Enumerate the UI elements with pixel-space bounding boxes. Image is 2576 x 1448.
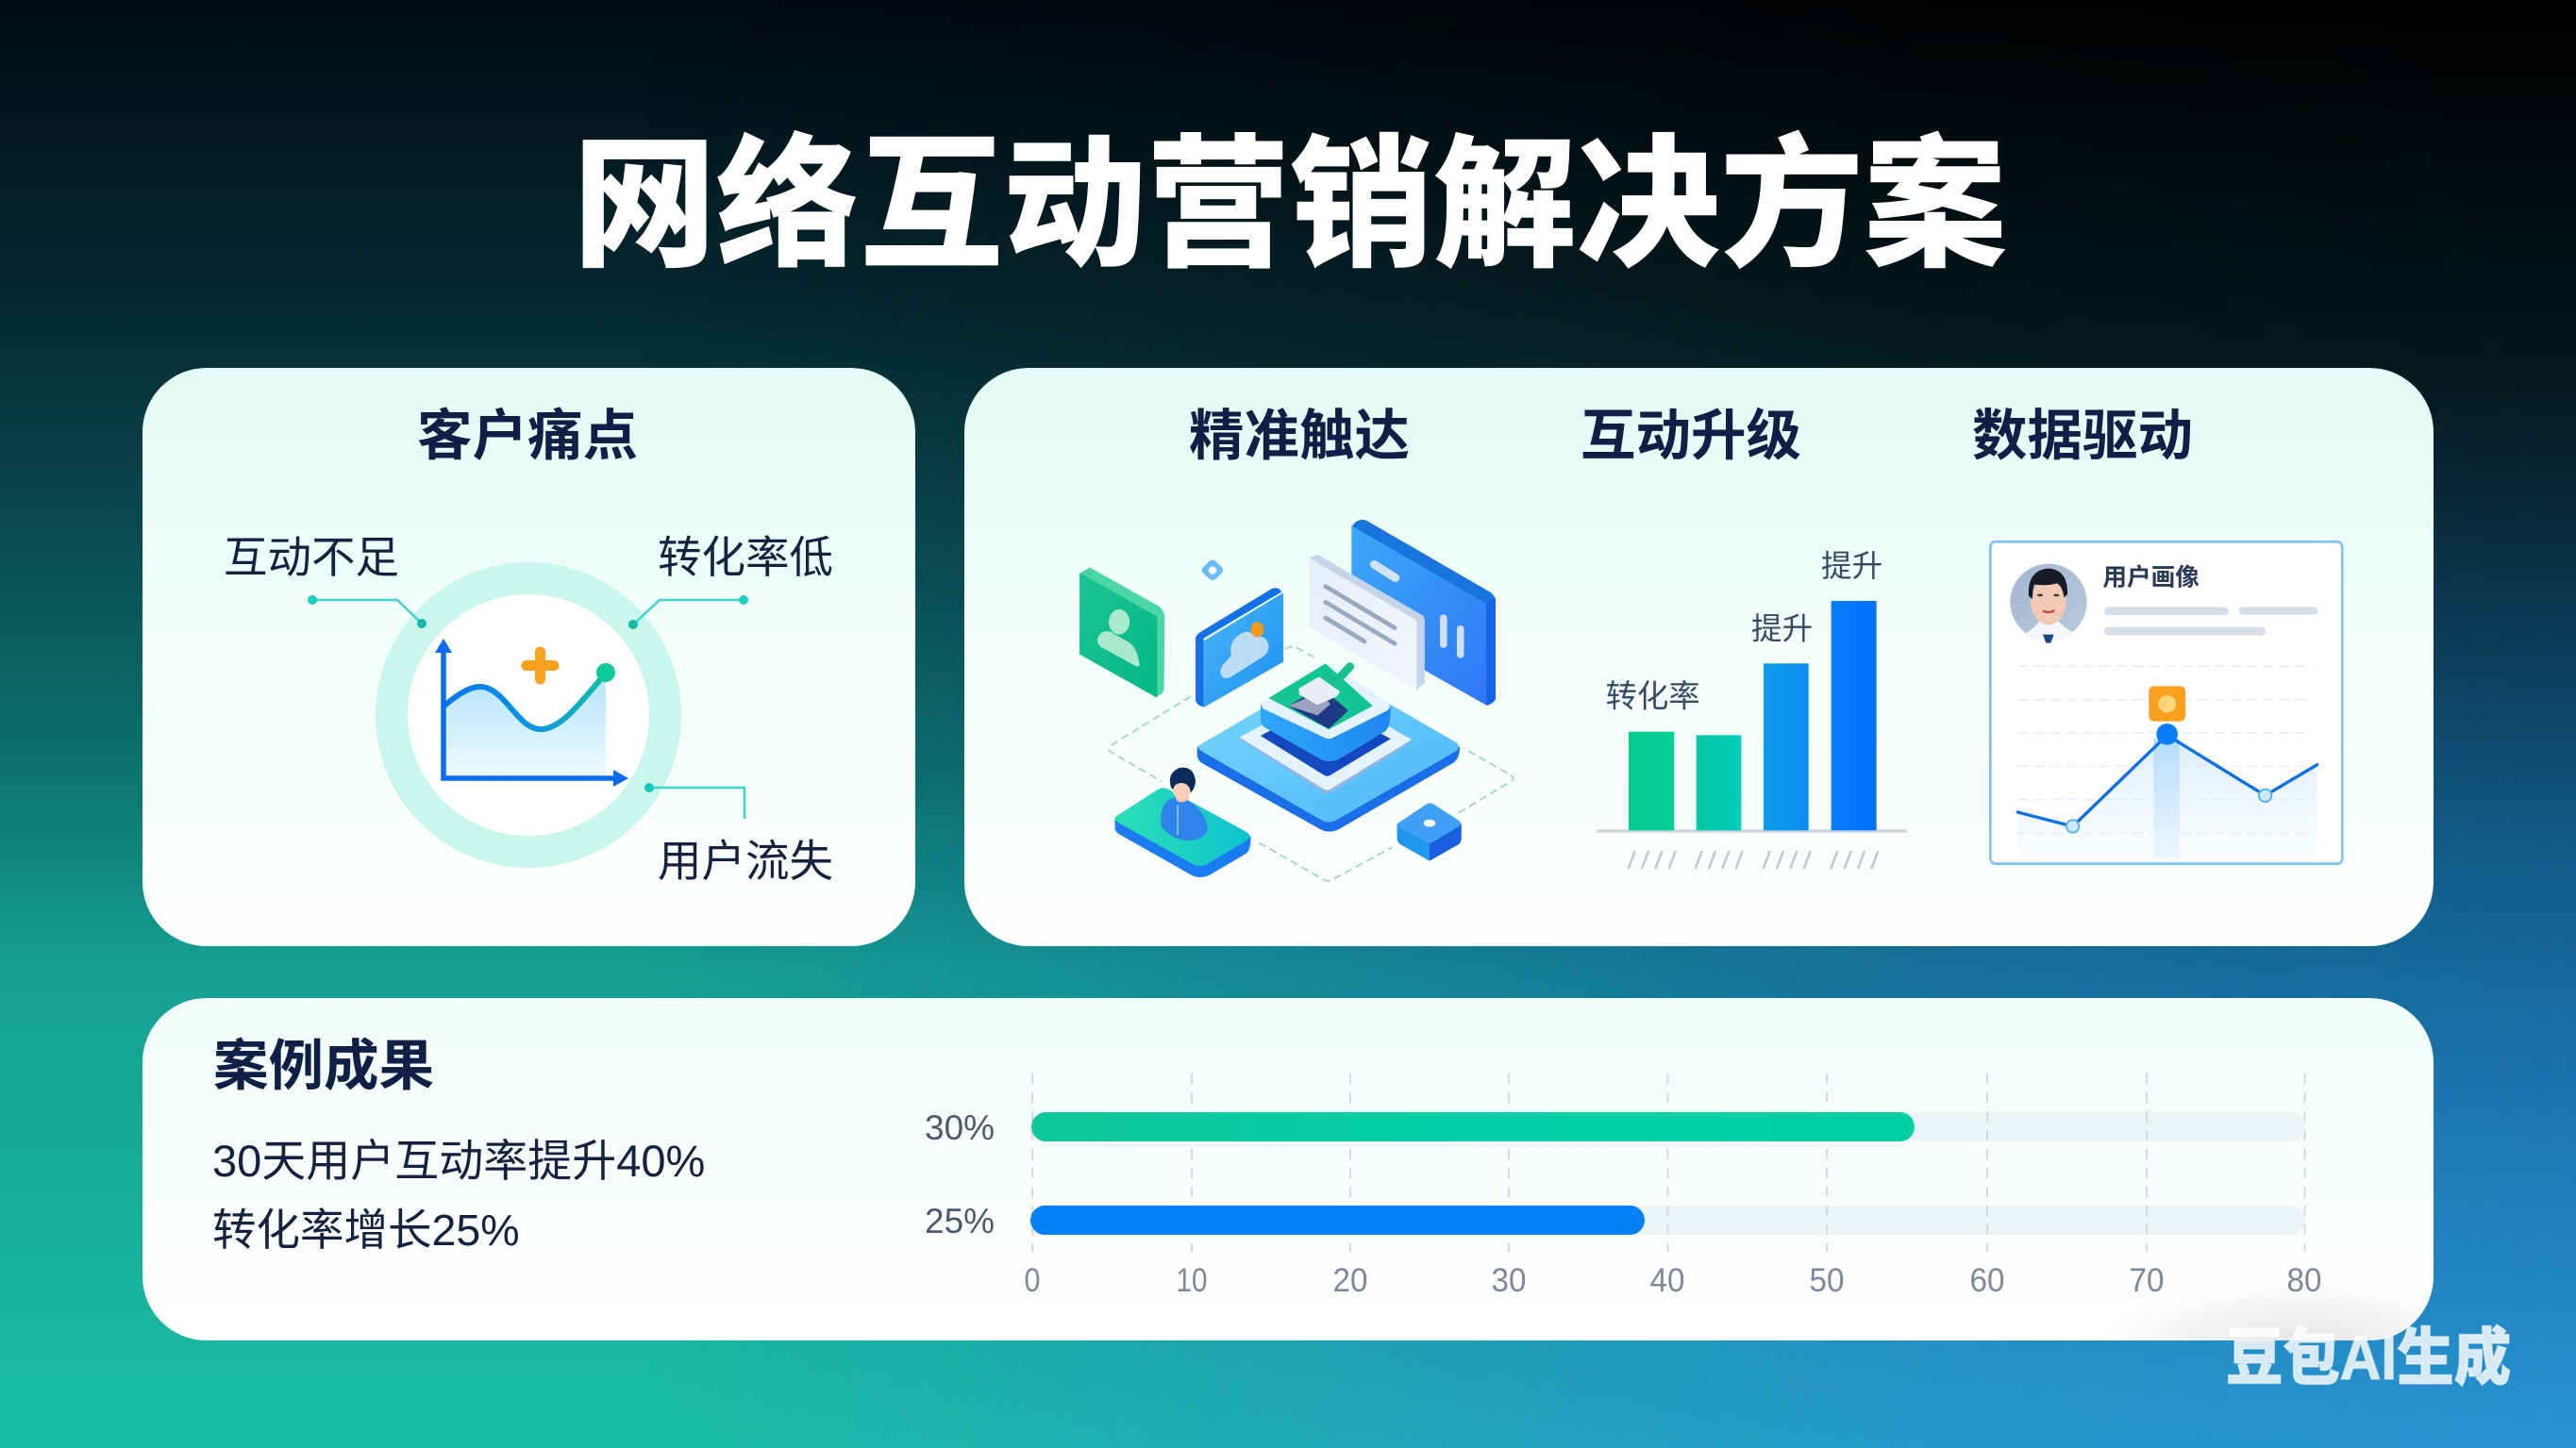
axis labels: 30 xyxy=(1491,1262,1527,1299)
label: user churn: 用户流失 xyxy=(658,837,833,886)
axis labels xyxy=(1025,1262,2321,1299)
heading: customer pain points: 客户痛点 xyxy=(417,406,638,467)
user profile card xyxy=(1990,541,2342,864)
bar: 30% xyxy=(1031,1112,1915,1141)
heading: precise reach: 精准触达 xyxy=(1189,406,1410,467)
label: lift 1: 提升 xyxy=(1751,611,1813,646)
icon: blue cloud card xyxy=(1196,588,1283,707)
icon: blue panel xyxy=(1351,520,1496,706)
ring xyxy=(392,578,665,852)
chart icon: declining curve xyxy=(435,639,628,787)
marker: orange badge xyxy=(2149,686,2185,722)
avatar xyxy=(2010,564,2087,643)
axis labels: 80 xyxy=(2287,1262,2321,1299)
label: lift 2: 提升 xyxy=(1821,548,1882,583)
panel: customer pain points xyxy=(142,368,915,946)
placeholder text lines xyxy=(2104,607,2317,636)
axis labels: 40 xyxy=(1649,1262,1685,1299)
icon: document sheet xyxy=(1310,555,1425,691)
label: low conversion: 转化率低 xyxy=(658,533,833,582)
bar 1 xyxy=(1629,732,1674,830)
label: 25%: 25% xyxy=(925,1202,995,1240)
icon: small cube xyxy=(1397,803,1462,861)
watermark: 豆包AI生成 xyxy=(2226,1323,2511,1392)
connector: low conversion xyxy=(628,595,748,629)
bar 4 xyxy=(1832,601,1877,830)
icon: token xyxy=(1200,558,1225,582)
axis labels: 60 xyxy=(1970,1262,2004,1299)
heading: data driven: 数据驱动 xyxy=(1972,406,2193,467)
icon: platform stack xyxy=(1197,663,1460,832)
bar: 25% xyxy=(1030,1206,1645,1235)
bar 2 xyxy=(1697,735,1741,830)
axis labels: 0 xyxy=(1025,1262,1040,1299)
bar 3 xyxy=(1764,663,1809,830)
heading: case results: 案例成果 xyxy=(213,1036,434,1097)
bar chart: conversion lift xyxy=(1597,548,1907,868)
bar tracks xyxy=(1031,1112,2305,1235)
icon: green user card xyxy=(1080,568,1164,697)
connector: lack of interaction xyxy=(308,595,427,628)
background blue overlay xyxy=(849,0,2576,1448)
axis labels: 20 xyxy=(1332,1262,1368,1299)
horizontal bar chart xyxy=(925,1074,2321,1299)
axis labels: 50 xyxy=(1810,1262,1844,1299)
label: user persona: 用户画像 xyxy=(2102,564,2200,591)
title: 网络互动营销解决方案 xyxy=(573,125,2007,286)
result line 2: 转化率增长25% xyxy=(212,1206,520,1255)
line chart xyxy=(2017,724,2317,858)
panel: solutions xyxy=(964,368,2434,946)
infographic canvas xyxy=(142,130,2510,1388)
isometric illustration xyxy=(1080,520,1514,881)
label: 30%: 30% xyxy=(925,1108,995,1147)
connector: user churn xyxy=(644,783,744,819)
label: lack of interaction: 互动不足 xyxy=(224,533,399,582)
heading: interaction upgrade: 互动升级 xyxy=(1581,406,1801,467)
icon: person on platform xyxy=(1115,768,1251,877)
axis labels: 70 xyxy=(2129,1262,2165,1299)
panel: case results xyxy=(142,998,2434,1340)
result line 1: 30天用户互动率提升40% xyxy=(212,1136,705,1186)
axis hash marks xyxy=(1629,852,1878,868)
axis labels: 10 xyxy=(1176,1262,1208,1299)
label: conversion: 转化率 xyxy=(1606,680,1700,715)
